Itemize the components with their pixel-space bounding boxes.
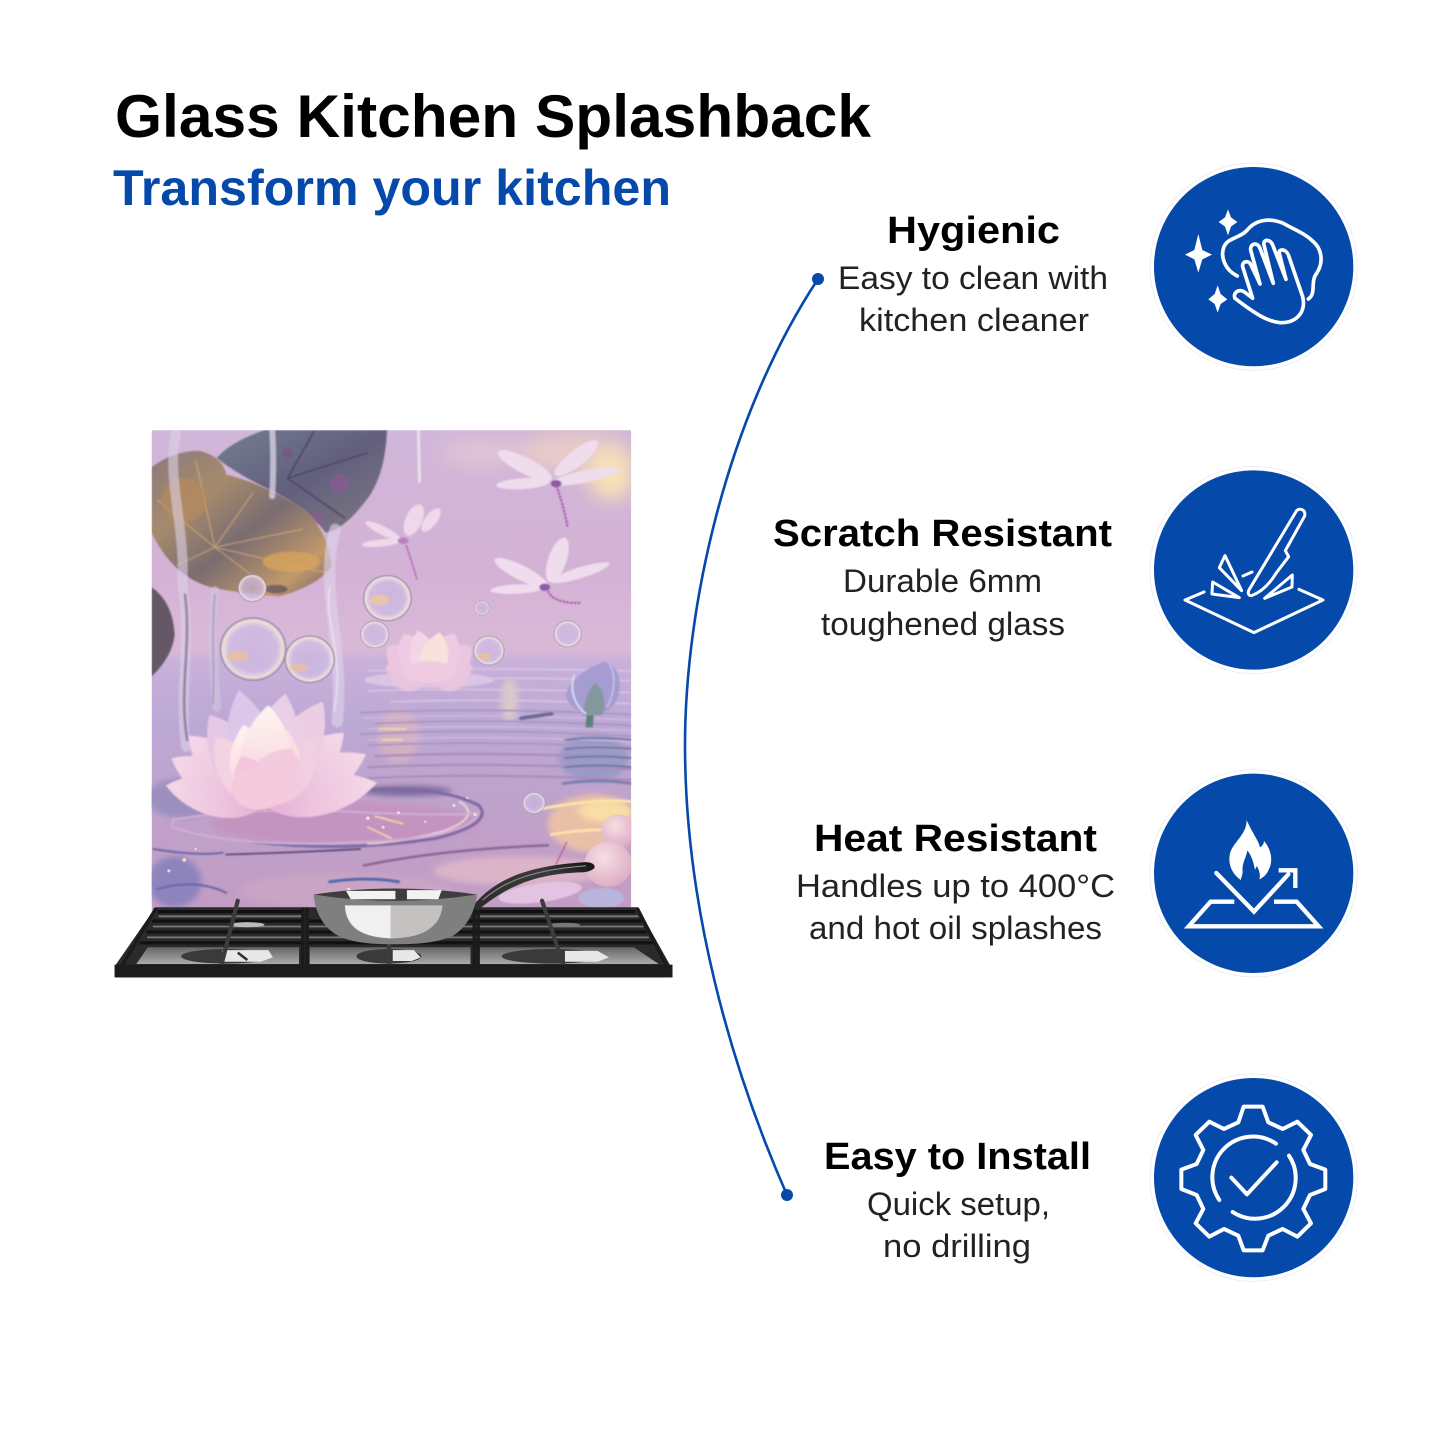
- feature text: Easy to Install: [824, 1136, 1091, 1264]
- feature text: Scratch Resistant: [773, 513, 1112, 642]
- vertical pan supports: [222, 901, 563, 964]
- feature text: Hygienic: Hygienic: [887, 210, 1060, 252]
- pan left highlight: [345, 905, 391, 938]
- water streams: [173, 430, 420, 747]
- bubbles: [219, 574, 582, 814]
- dragonfly: lower right: [490, 535, 611, 603]
- icon: hand wiping with sparkles: [1150, 163, 1357, 370]
- title: Glass Kitchen Splashback: [115, 83, 872, 150]
- pan body: [314, 894, 477, 944]
- pearls: [584, 815, 636, 887]
- feature text: Scratch Resistant: Scratch Resistant: [773, 513, 1112, 555]
- hob body: [115, 907, 670, 977]
- front lip: [115, 965, 673, 977]
- feature text: Scratch Resistant: toughened glass: [821, 606, 1065, 642]
- feature text: Heat Resistant: and hot oil splashes: [809, 910, 1102, 946]
- feature text: Easy to Install: Easy to Install: [824, 1136, 1091, 1178]
- bottom dot: [781, 1189, 793, 1201]
- pan handle highlight: [483, 866, 586, 900]
- rim highlights: [346, 890, 442, 899]
- dragonfly: top right: [494, 435, 622, 527]
- pan rim: [314, 888, 477, 901]
- feature text: Hygienic: [838, 210, 1108, 338]
- feature text: Scratch Resistant: Durable 6mm: [843, 563, 1042, 599]
- water reflections: [146, 678, 640, 908]
- connector curve: [685, 273, 824, 1201]
- icon: gear with check mark: [1150, 1074, 1357, 1281]
- burner plates: [136, 947, 659, 964]
- top dot: [812, 273, 824, 285]
- subtitle: Transform your kitchen: [113, 160, 671, 216]
- icon: blade scratching glass: [1150, 466, 1357, 674]
- panel: lotus artwork splashback: [146, 430, 640, 910]
- frying pan: [314, 862, 595, 944]
- feature text: Heat Resistant: Handles up to 400°C: [796, 868, 1115, 904]
- submerged dragonfly: [497, 842, 624, 908]
- burners: [181, 922, 609, 964]
- feature text: Heat Resistant: Heat Resistant: [814, 818, 1097, 860]
- feature text: Easy to Install: Quick setup,: [867, 1186, 1050, 1222]
- lotus bud: [566, 662, 620, 727]
- product image: splashback above gas hob: [115, 430, 673, 977]
- brown lily pad: [152, 451, 332, 596]
- feature text: Hygienic: kitchen cleaner: [859, 302, 1089, 338]
- dark lily pad: [217, 430, 387, 533]
- feature text: Heat Resistant: [796, 818, 1115, 946]
- icon: flame on heat-proof surface: [1150, 770, 1357, 977]
- grate bars: [123, 909, 666, 964]
- pan handle: [473, 862, 595, 911]
- feature text: Easy to Install: no drilling: [883, 1228, 1031, 1264]
- lily pad at left edge: [152, 587, 175, 676]
- water: [152, 647, 631, 910]
- dragonfly: middle: [361, 501, 444, 579]
- feature text: Hygienic: Easy to clean with: [838, 260, 1108, 296]
- sunset clouds: [441, 433, 634, 500]
- ripples: [154, 669, 631, 893]
- sky: [152, 430, 631, 670]
- iridescent sparkle: [167, 797, 477, 890]
- small distant lotus: [364, 630, 494, 692]
- pan right shade: [391, 905, 443, 938]
- gas hob: [115, 901, 673, 977]
- large lotus: [166, 690, 377, 818]
